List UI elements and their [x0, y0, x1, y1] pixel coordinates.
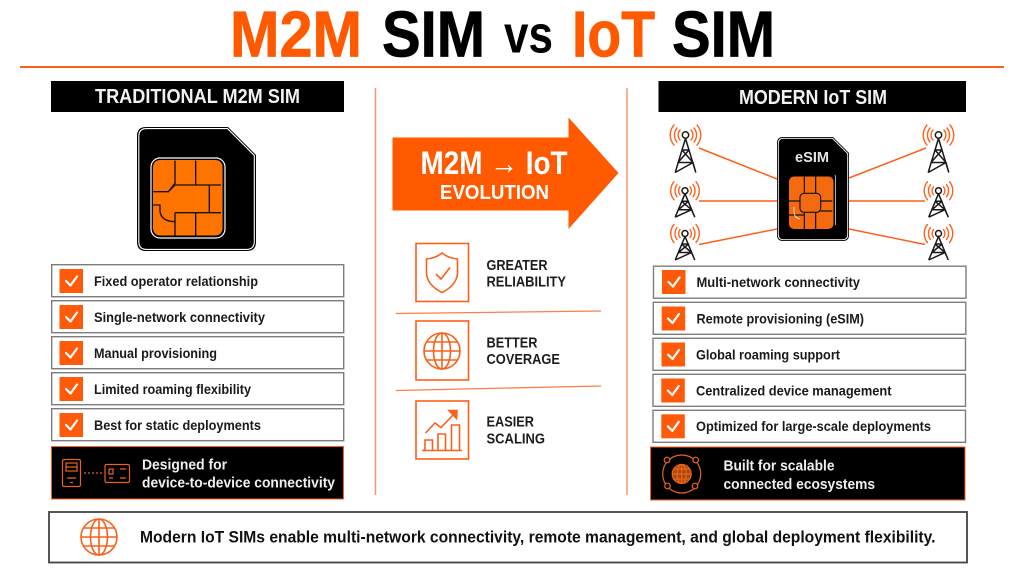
callout: device-to-device connectivity: Designed for [142, 456, 227, 474]
feature: remote provisioning: Remote provisioning (eSIM) [696, 310, 864, 326]
icon: eSIM card [777, 137, 849, 241]
feature: limited roaming flexibility: Limited roaming flexibility [94, 381, 251, 397]
feature: global roaming support: Global roaming support [696, 346, 840, 362]
arrow: M2M to IoT evolution [392, 118, 618, 229]
feature: centralized device management: Centralized device management [696, 382, 892, 398]
callout: scalable connected ecosystems: connected ecosystems [724, 476, 875, 493]
feature: global roaming support [653, 338, 966, 370]
feature: best for static deployments: Best for static deployments [94, 417, 261, 433]
icon: globe [81, 519, 117, 555]
icon: physical SIM card [137, 127, 256, 251]
icon: growth chart [422, 410, 462, 450]
icon: cell tower top left [670, 125, 701, 172]
feature: limited roaming flexibility [52, 373, 344, 405]
panel: bottom summary: Modern IoT SIMs enable multi-network connectivity, remote management, and global deployment flexibility. [140, 528, 936, 546]
callout: device-to-device connectivity: device-to-device connectivity [142, 474, 336, 492]
benefit: easier scaling: SCALING [486, 432, 545, 448]
icon: connected devices [62, 460, 130, 486]
connection lines [699, 148, 926, 244]
benefit: greater reliability [416, 244, 566, 302]
benefit: easier scaling: EASIER [486, 414, 534, 430]
feature: best for static deployments [52, 409, 344, 441]
heading: modern IoT SIM [658, 81, 966, 112]
feature: optimized for large-scale deployments: Optimized for large-scale deployments [696, 418, 931, 434]
arrow: M2M to IoT evolution: M2M → IoT [420, 145, 568, 181]
feature: single-network connectivity: Single-network connectivity [94, 309, 265, 325]
icon: shield [426, 253, 458, 292]
feature: multi-network connectivity [654, 266, 966, 298]
benefit: greater reliability: GREATER [486, 258, 548, 274]
feature: centralized device management [653, 374, 966, 406]
panel: bottom summary [49, 512, 967, 562]
benefit: better coverage: COVERAGE [486, 352, 560, 368]
heading: traditional M2M SIM [51, 81, 344, 112]
benefit: easier scaling [416, 401, 545, 459]
panel: modern IoT SIM [650, 81, 966, 500]
feature: manual provisioning: Manual provisioning [94, 345, 217, 361]
icon: cell tower top right [923, 125, 954, 172]
heading: modern IoT SIM: MODERN IoT SIM [739, 87, 887, 109]
feature: optimized for large-scale deployments [653, 410, 966, 442]
benefit: better coverage [416, 321, 560, 380]
icon: cell tower bottom left [671, 224, 699, 260]
icon: globe [424, 333, 460, 369]
panel: traditional M2M SIM [51, 81, 344, 499]
benefit: better coverage: BETTER [486, 336, 538, 352]
icon: cell tower middle right [924, 182, 953, 217]
feature: single-network connectivity [52, 301, 344, 333]
feature: remote provisioning [653, 302, 966, 334]
feature: manual provisioning [52, 337, 344, 369]
callout: scalable connected ecosystems: Built for scalable [724, 458, 834, 474]
panel: evolution and benefits [392, 118, 618, 459]
benefit: greater reliability: RELIABILITY [486, 274, 566, 290]
callout: scalable connected ecosystems [650, 447, 965, 500]
feature: fixed operator relationship [52, 265, 344, 297]
heading: traditional M2M SIM: TRADITIONAL M2M SIM [95, 86, 300, 108]
callout: device-to-device connectivity [52, 446, 344, 499]
icon: cell tower middle left [671, 182, 699, 217]
arrow: M2M to IoT evolution: EVOLUTION [440, 182, 549, 204]
title [230, 0, 775, 70]
title: vs [504, 6, 553, 64]
feature: multi-network connectivity: Multi-network connectivity [696, 274, 860, 290]
feature: fixed operator relationship: Fixed operator relationship [94, 273, 258, 289]
icon: eSIM card: eSIM [795, 150, 829, 166]
icon: connected globe [663, 455, 701, 493]
icon: cell tower bottom right [924, 224, 953, 260]
